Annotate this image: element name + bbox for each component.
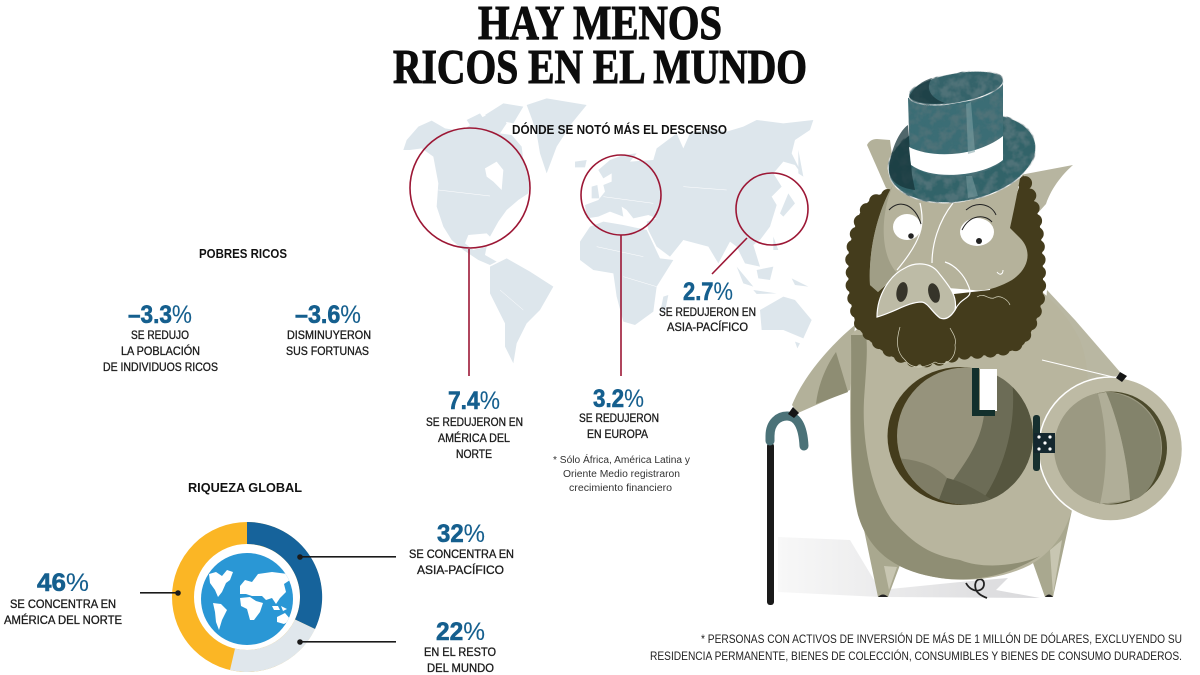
footnote: growth regions: * Sólo África, América Latina y <box>553 453 690 466</box>
stat: north america <box>426 387 523 461</box>
eye right <box>960 205 996 246</box>
tail <box>966 579 987 598</box>
stat: fortunes <box>286 301 371 358</box>
snout <box>877 264 956 319</box>
beard <box>848 175 1043 365</box>
right arm <box>1040 290 1120 392</box>
stat: 22% rest of world <box>424 618 496 675</box>
leader: 22% <box>297 639 396 645</box>
nose lines <box>897 203 970 310</box>
face <box>870 178 1028 292</box>
heading: riqueza global: RIQUEZA GLOBAL <box>188 481 302 495</box>
footnote: growth regions: crecimiento financiero <box>569 483 672 494</box>
stat: population: –3.3% <box>128 301 192 329</box>
stat: 46% north america: SE CONCENTRA EN <box>10 599 116 611</box>
eye left <box>889 204 921 240</box>
title <box>393 0 807 94</box>
stat: north america: NORTE <box>456 449 492 461</box>
stat: 22% rest of world: DEL MUNDO <box>427 663 494 675</box>
world map <box>403 98 813 363</box>
stat: north america: 7.4% <box>448 387 500 415</box>
stat: fortunes: SUS FORTUNAS <box>286 346 369 358</box>
icon: globe <box>201 553 293 645</box>
donut chart <box>183 522 322 672</box>
leader: 32% <box>297 554 396 560</box>
footnote <box>650 633 1182 663</box>
callout: asia circle <box>712 173 808 274</box>
top hat <box>880 65 1044 216</box>
stat: asia-pacific: 2.7% <box>683 278 733 306</box>
stat: europe: EN EUROPA <box>587 429 648 441</box>
stat: 32% asia-pacific <box>409 520 514 577</box>
stat: europe: SE REDUJERON <box>579 413 659 425</box>
heading: pobres ricos: POBRES RICOS <box>199 247 287 261</box>
beard curl lines <box>897 295 1010 367</box>
stat: asia-pacific <box>659 278 756 334</box>
stat: fortunes: –3.6% <box>295 301 361 329</box>
belly hole <box>888 367 1033 505</box>
stat: fortunes: DISMINUYERON <box>287 330 371 342</box>
stat: 22% rest of world: 22% <box>436 618 485 646</box>
stat: population: LA POBLACIÓN <box>121 345 200 358</box>
belly door <box>1038 377 1182 521</box>
stat: asia-pacific: SE REDUJERON EN <box>659 307 756 319</box>
door handle hand <box>1116 372 1127 382</box>
left arm <box>792 325 855 413</box>
legs <box>863 510 1072 597</box>
ears <box>867 139 1073 215</box>
banknote in hole <box>972 368 997 416</box>
stat: europe <box>579 385 659 441</box>
body <box>850 290 1088 580</box>
footnote: growth regions: Oriente Medio registraron <box>563 469 680 480</box>
cane <box>767 416 804 605</box>
callout: europe circle <box>581 155 661 376</box>
callout: north america circle <box>410 128 530 376</box>
stat: population <box>103 301 218 374</box>
stat: population: DE INDIVIDUOS RICOS <box>103 362 218 374</box>
illustration: pig with top hat <box>767 65 1182 605</box>
stat: population: SE REDUJO <box>131 330 189 342</box>
stat: 46% north america: AMÉRICA DEL NORTE <box>4 614 122 627</box>
mouth <box>997 270 1003 274</box>
stat: 46% north america <box>4 569 122 627</box>
footnote: growth regions <box>553 453 690 494</box>
title: RICOS EN EL MUNDO <box>393 39 807 94</box>
stat: europe: 3.2% <box>593 385 644 413</box>
map heading: DÓNDE SE NOTÓ MÁS EL DESCENSO <box>512 122 727 137</box>
stat: 22% rest of world: EN EL RESTO <box>424 647 496 659</box>
door hinge <box>1033 415 1055 471</box>
stat: 46% north america: 46% <box>37 569 89 597</box>
floor shadow <box>778 537 1040 598</box>
stat: 32% asia-pacific: ASIA-PACÍFICO <box>417 564 504 577</box>
cane hand <box>788 407 799 418</box>
stat: 32% asia-pacific: SE CONCENTRA EN <box>409 549 514 561</box>
nostrils <box>895 281 942 304</box>
stat: asia-pacific: ASIA-PACÍFICO <box>667 321 748 334</box>
stat: north america: SE REDUJERON EN <box>426 417 523 429</box>
leader: 46% <box>140 590 181 596</box>
stat: north america: AMÉRICA DEL <box>438 432 511 445</box>
stat: 32% asia-pacific: 32% <box>437 520 485 548</box>
